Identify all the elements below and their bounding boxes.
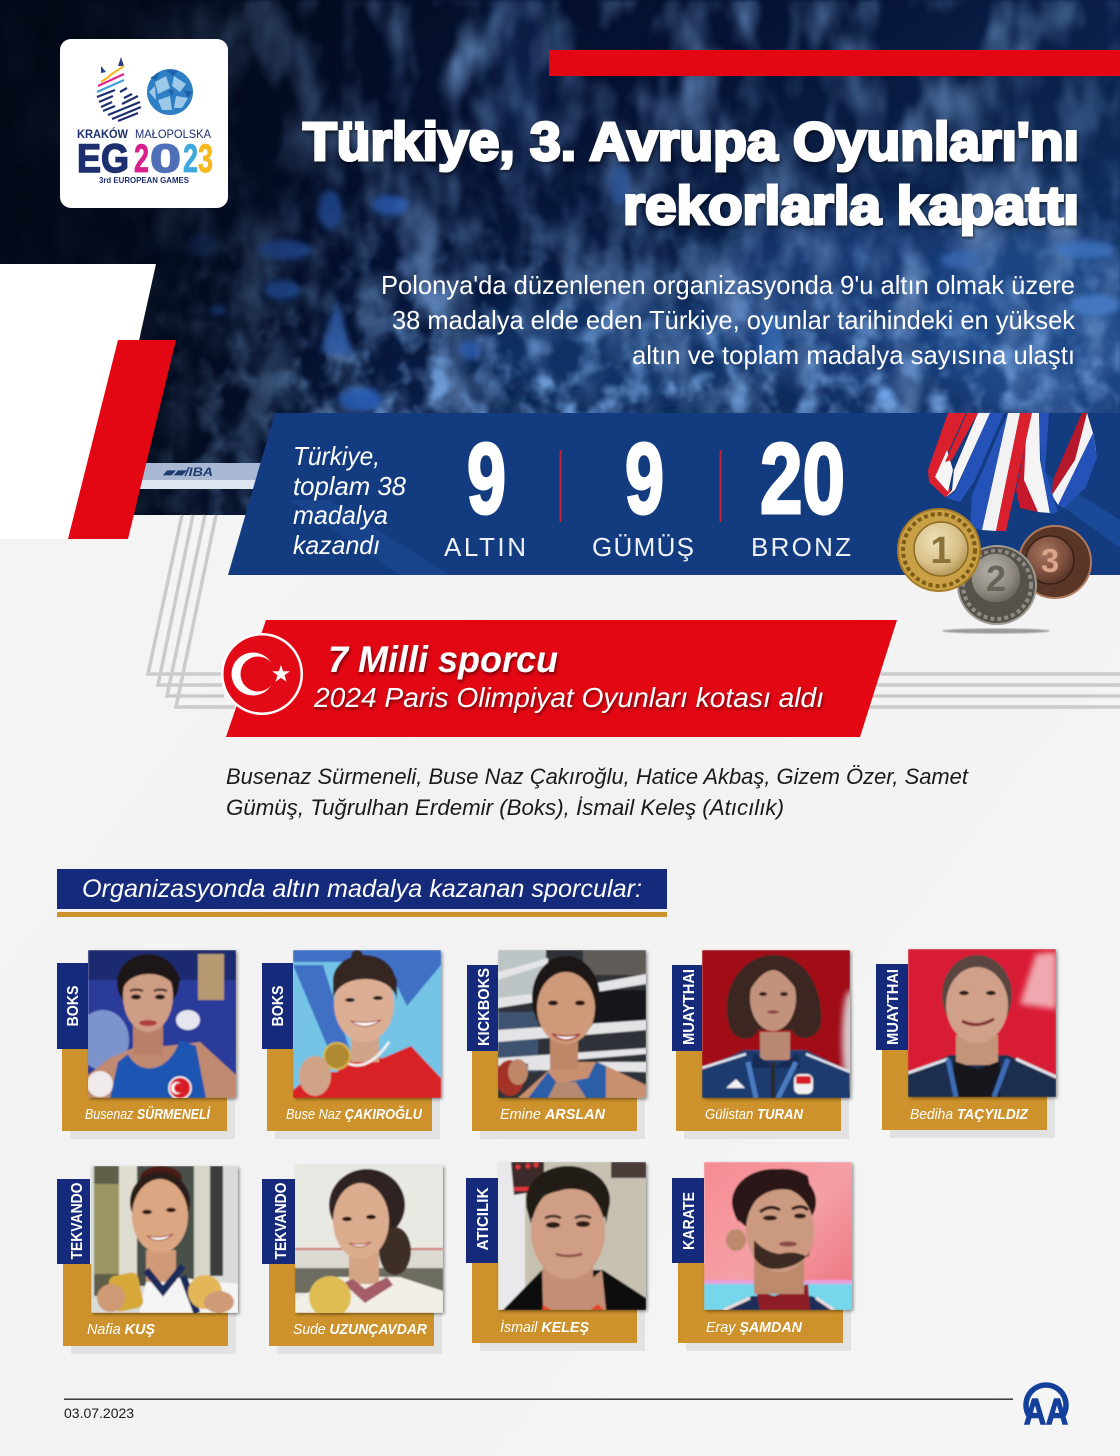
- white slanted panel: [0, 264, 156, 539]
- icon: AA logo: AA: [1024, 1391, 1068, 1432]
- red top bar: [549, 50, 1120, 76]
- card: Nafia Kuş: [57, 1166, 238, 1354]
- section heading: Organizasyonda altın madalya kazanan sporcular:: [82, 875, 642, 903]
- title: rekorlarla kapattı: [623, 176, 1079, 236]
- stat: bronze: BRONZ: [751, 532, 851, 562]
- stat: bronze: 20: [760, 423, 845, 535]
- stat: gold: 9: [467, 423, 506, 535]
- logo wordmark: 2: [183, 137, 198, 181]
- card: Gülistan Turan: [672, 950, 858, 1139]
- band intro text: kazandı: [293, 530, 380, 560]
- logo wordmark: EG: [77, 137, 129, 181]
- photo: [704, 1162, 852, 1310]
- ring rope with IBA mark: [140, 463, 265, 489]
- band intro text: Türkiye,: [293, 441, 380, 471]
- stat: gold: [444, 423, 526, 562]
- photo: [498, 1162, 646, 1310]
- card: Bediha Taçyıldız: MUAYTHAI: [885, 969, 902, 1045]
- photo: [496, 950, 646, 1098]
- card: Emine Arslan: KICKBOKS: [476, 968, 493, 1046]
- banner heading: 7 Milli sporcu: [328, 639, 558, 680]
- card: Buse Naz Çakıroğlu: BOKS: [270, 985, 287, 1026]
- photo: [908, 949, 1056, 1097]
- card: Nafia Kuş: TEKVANDO: [69, 1182, 86, 1260]
- bronze medal: 3: [1041, 542, 1059, 579]
- red slanted panel: [68, 340, 176, 539]
- name: Eray ŞAMDAN: [706, 1319, 803, 1336]
- card: Gülistan Turan: MUAYTHAI: [681, 969, 698, 1045]
- stat: silver: GÜMÜŞ: [592, 532, 694, 562]
- intro paragraph: [381, 270, 1076, 370]
- title: Türkiye, 3. Avrupa Oyunları'nı: [303, 112, 1079, 172]
- name: Emine ARSLAN: [500, 1106, 606, 1123]
- band intro text: [293, 441, 407, 560]
- red banner: Olympic quota: [221, 620, 897, 737]
- gold medal: [898, 509, 980, 591]
- card: Emine Arslan: [467, 950, 646, 1139]
- name: İsmail KELEŞ: [500, 1319, 589, 1336]
- name: Busenaz SÜRMENELİ: [85, 1106, 211, 1123]
- card: Eray Şamdan: [672, 1162, 852, 1351]
- logo card: European Games 2023: [60, 39, 228, 208]
- band intro text: madalya: [293, 500, 388, 530]
- icon: blue gem: [147, 69, 193, 115]
- photo: [91, 1166, 238, 1313]
- band intro text: toplam 38: [293, 471, 407, 501]
- stat: silver: 9: [625, 423, 664, 535]
- ribbons: [928, 413, 1097, 531]
- card: Bediha Taçyıldız: [876, 949, 1056, 1138]
- logo wordmark: KRAKÓW: [77, 128, 128, 141]
- banner subheading: 2024 Paris Olimpiyat Oyunları kotası aldı: [313, 682, 824, 713]
- athlete names text: Busenaz Sürmeneli, Buse Naz Çakıroğlu, Hatice Akbaş, Gizem Özer, Samet: [226, 764, 969, 789]
- intro paragraph: altın ve toplam madalya sayısına ulaştı: [632, 340, 1075, 370]
- silver medal: [958, 546, 1036, 624]
- name: Bediha TAÇYILDIZ: [910, 1106, 1029, 1123]
- card: Sude Uzunçavdar: [262, 1165, 443, 1354]
- stat: silver: [592, 423, 694, 562]
- section heading: [57, 869, 667, 917]
- intro paragraph: 38 madalya elde eden Türkiye, oyunlar tarihindeki en yüksek: [392, 305, 1076, 335]
- title: [303, 112, 1079, 236]
- photo: [295, 1165, 443, 1318]
- name: Nafia KUŞ: [87, 1321, 155, 1338]
- stat: gold: ALTIN: [444, 532, 526, 562]
- name: Buse Naz ÇAKIROĞLU: [286, 1105, 423, 1123]
- silver medal: 2: [986, 558, 1006, 599]
- photo: [293, 950, 441, 1098]
- footer rule: [64, 1398, 1013, 1400]
- icon: Turkish flag: [221, 633, 303, 715]
- gold medal: 1: [930, 530, 952, 572]
- bronze medal: [1019, 526, 1091, 598]
- card: Busenaz Sürmeneli: [57, 950, 236, 1139]
- card: İsmail Keleş: [466, 1162, 646, 1351]
- medals illustration: [898, 413, 1097, 634]
- logo wordmark: 2: [134, 137, 149, 181]
- athlete names text: Gümüş, Tuğrulhan Erdemir (Boks), İsmail Keleş (Atıcılık): [226, 795, 784, 820]
- logo wordmark: 3: [198, 137, 213, 181]
- intro paragraph: Polonya'da düzenlenen organizasyonda 9'u altın olmak üzere: [381, 270, 1075, 300]
- logo wordmark: MAŁOPOLSKA: [135, 129, 211, 141]
- medal count band: [228, 413, 1120, 575]
- medal shadow: [942, 628, 1050, 634]
- card: İsmail Keleş: ATICILIK: [475, 1187, 492, 1250]
- name: Sude UZUNÇAVDAR: [293, 1321, 427, 1338]
- date: 03.07.2023: [64, 1405, 134, 1421]
- ring rope with IBA mark: ▰▰/IBA: [162, 465, 213, 479]
- card: Eray Şamdan: KARATE: [681, 1192, 698, 1250]
- photo: [702, 950, 858, 1098]
- athlete names text: [226, 764, 969, 820]
- card: Buse Naz Çakıroğlu: [262, 950, 441, 1139]
- card: Busenaz Sürmeneli: BOKS: [65, 985, 82, 1026]
- photo: [77, 950, 236, 1099]
- header photo: crowd background: [0, 0, 1120, 515]
- logo wordmark: [77, 128, 213, 185]
- logo wordmark: 0: [150, 137, 181, 181]
- stat: bronze: [751, 423, 851, 562]
- logo wordmark: 3rd EUROPEAN GAMES: [99, 175, 189, 185]
- icon: cat mark: [97, 57, 141, 121]
- name: Gülistan TURAN: [705, 1106, 804, 1123]
- grey guide lines: [148, 515, 1120, 707]
- card: Sude Uzunçavdar: TEKVANDO: [273, 1182, 290, 1260]
